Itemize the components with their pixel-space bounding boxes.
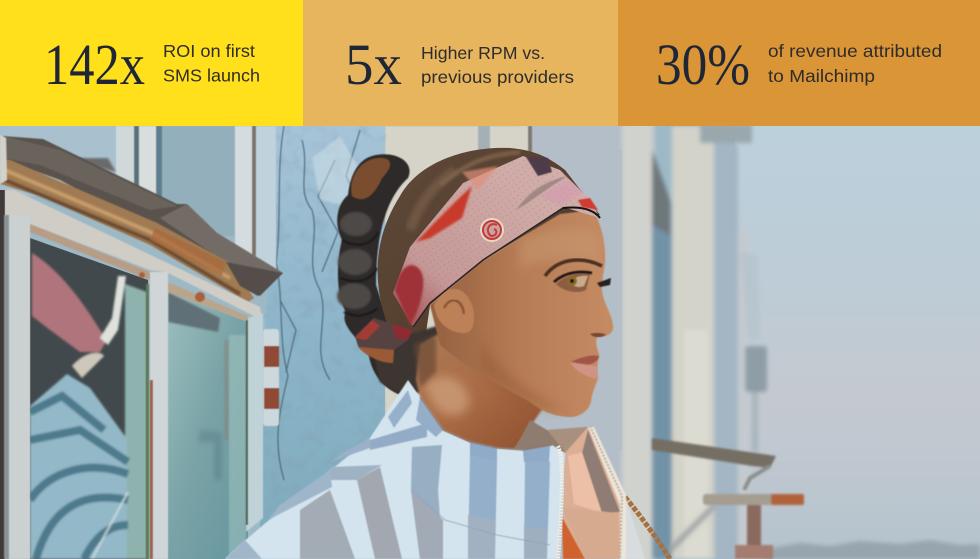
stat label: of revenue attributed to Mailchimp: of revenue attributed	[768, 41, 942, 61]
scarf tail	[355, 318, 412, 363]
stat label: ROI on first SMS launch	[163, 41, 260, 86]
white frame bars	[4, 190, 263, 559]
stat label: Higher RPM vs. previous providers: Higher RPM vs.	[421, 43, 545, 63]
stat label: ROI on first SMS launch: ROI on first	[163, 41, 255, 61]
nose shadow	[590, 333, 606, 337]
window roof	[0, 135, 283, 302]
hanging rope	[625, 497, 670, 559]
stat number: 5x: 5x	[345, 32, 402, 97]
nape hair under scarf	[372, 325, 440, 394]
stat label: Higher RPM vs. previous providers: previous providers	[421, 67, 574, 87]
neck	[414, 334, 543, 450]
cheek shadow	[484, 356, 552, 415]
stat label: ROI on first SMS launch: SMS launch	[163, 66, 260, 86]
stat label: Higher RPM vs. previous providers	[421, 43, 574, 87]
stat panel: 142x ROI	[0, 0, 303, 126]
stat label: of revenue attributed to Mailchimp: to Mailchimp	[768, 66, 875, 86]
cracked blue wall	[260, 126, 387, 546]
stat number: 30%: 30%	[656, 32, 750, 97]
right window pane	[168, 292, 248, 559]
face	[430, 210, 613, 417]
background window frames behind roof	[0, 126, 276, 276]
headband logo	[482, 220, 502, 240]
photo: woman in headband beside a weathered window	[0, 120, 980, 559]
hinge	[263, 329, 279, 426]
jacket body	[225, 380, 565, 559]
distant horizon	[765, 540, 980, 559]
lips	[570, 355, 599, 379]
stat label: of revenue attributed to Mailchimp	[768, 41, 942, 86]
cream wall behind head	[385, 126, 622, 450]
jacket lining	[515, 420, 645, 559]
jacket zipper	[558, 446, 562, 559]
left window pane with reflection	[30, 238, 148, 559]
stat panel: 5x RPM	[303, 0, 618, 126]
eye and eyebrow	[545, 260, 611, 292]
jacket stripes	[225, 390, 552, 559]
stat panel: 30% revenue	[618, 0, 980, 126]
headband	[393, 156, 600, 327]
main hair	[378, 148, 600, 336]
background: sky and blurred building	[520, 120, 980, 559]
rusty railing posts	[652, 438, 804, 559]
stat number: 142x: 142x	[44, 32, 145, 97]
window frame and glass	[0, 190, 279, 559]
ear	[434, 289, 474, 333]
jacket	[225, 380, 670, 559]
hair braid bun	[337, 154, 418, 394]
woman figure	[225, 148, 670, 559]
